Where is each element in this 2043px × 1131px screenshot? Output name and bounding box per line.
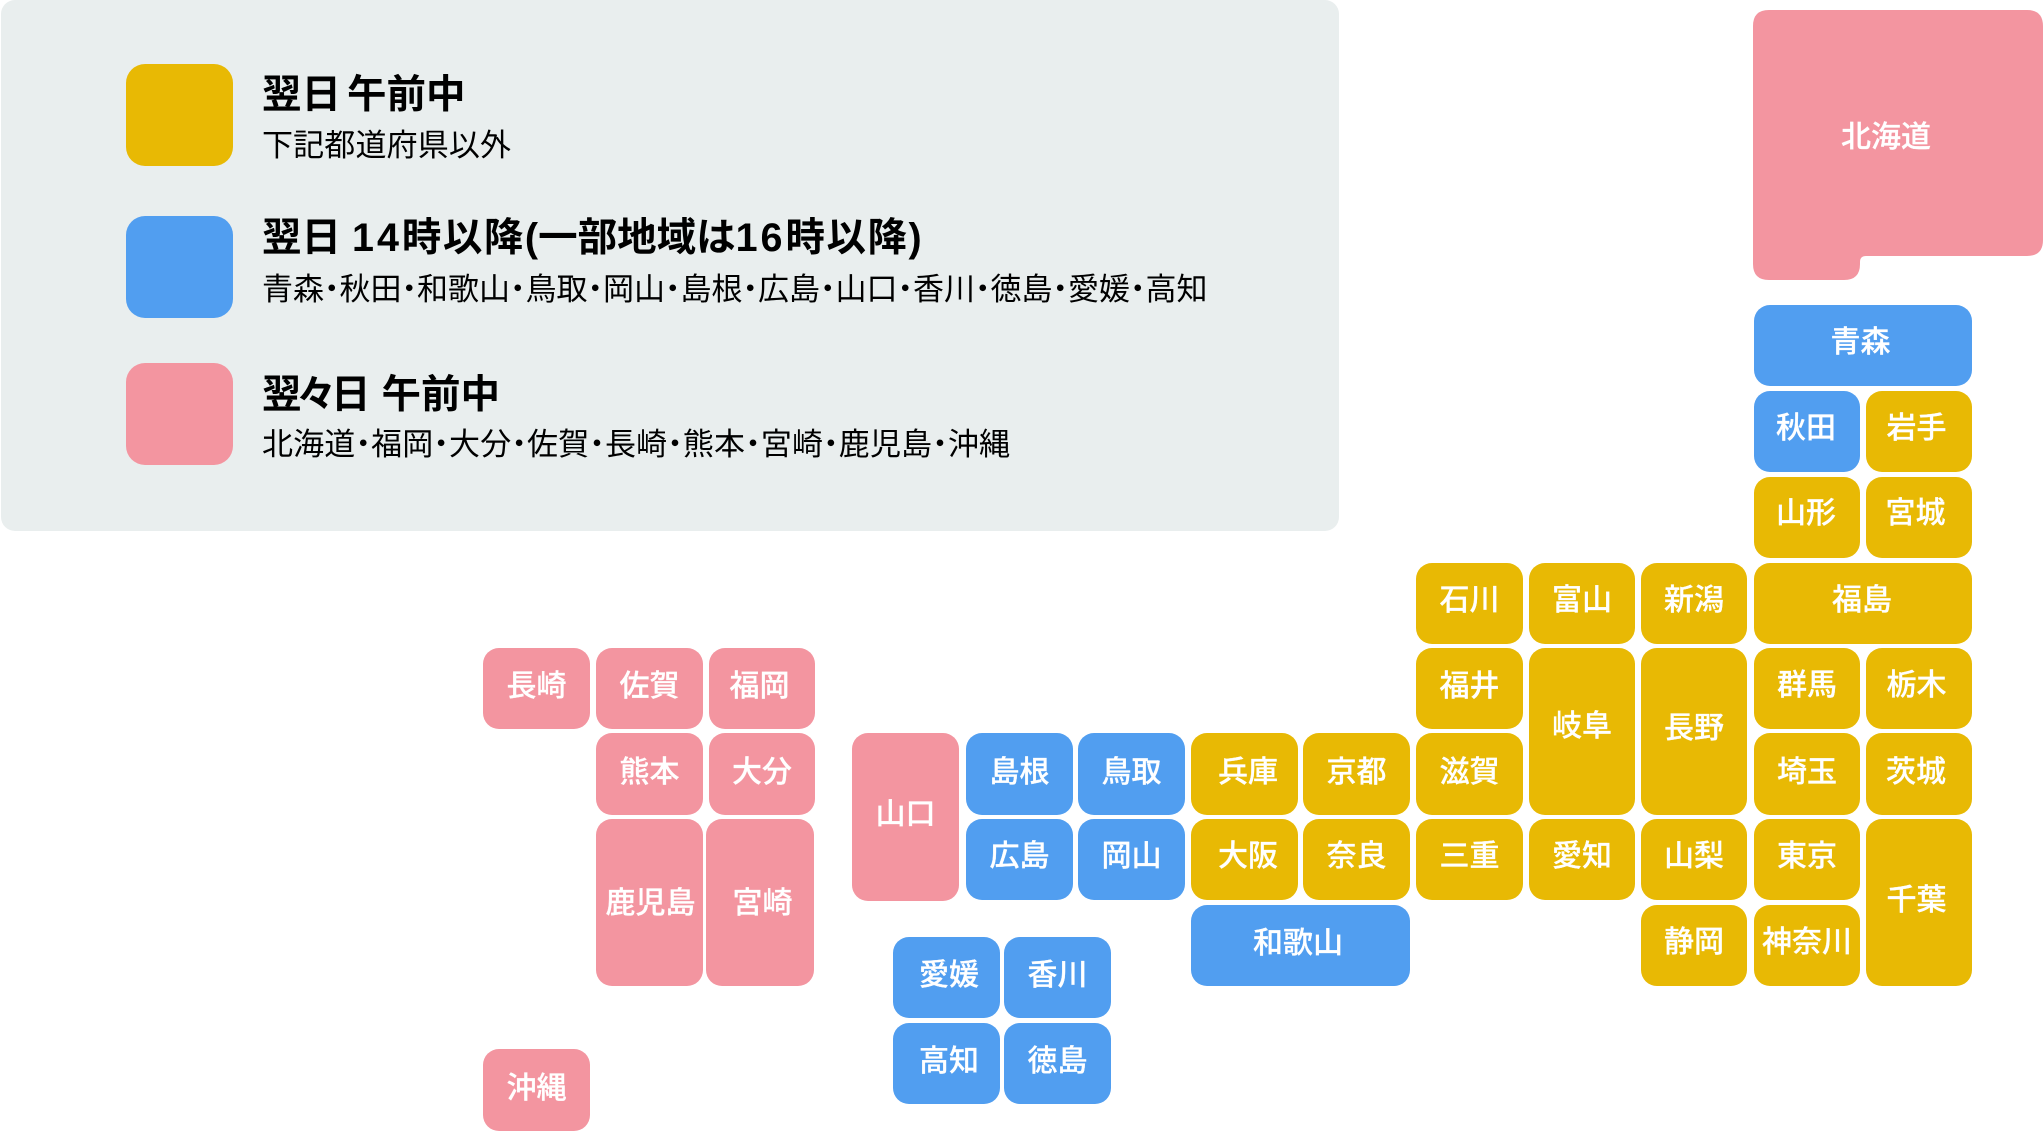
tile: 愛知	[1529, 819, 1635, 900]
tile: 神奈川	[1754, 905, 1860, 986]
tile: 岩手	[1866, 391, 1972, 472]
tile: 島根: 島根	[990, 746, 1050, 790]
tile: 岐阜	[1529, 648, 1635, 815]
tile: 埼玉: 埼玉	[1777, 746, 1837, 790]
tile: 北海道: 北海道	[1841, 112, 1931, 156]
tile: 広島	[966, 819, 1073, 900]
tile: 福島: 福島	[1832, 575, 1892, 619]
tile: 鳥取	[1078, 733, 1185, 815]
tile: 秋田	[1754, 391, 1860, 472]
tile: 新潟: 新潟	[1664, 575, 1724, 619]
tile: 北海道	[1753, 10, 2043, 280]
tile: 栃木: 栃木	[1886, 660, 1946, 704]
tile: 宮崎: 宮崎	[732, 878, 792, 922]
tile: 沖縄: 沖縄	[506, 1062, 566, 1106]
tile: 滋賀	[1416, 733, 1523, 815]
tile: 長野	[1641, 648, 1747, 815]
tile: 愛知: 愛知	[1552, 831, 1612, 875]
tile: 栃木	[1866, 648, 1972, 729]
tile: 群馬	[1754, 648, 1860, 729]
tile: 兵庫	[1191, 733, 1298, 815]
tile: 東京	[1754, 819, 1860, 900]
tile: 高知: 高知	[919, 1036, 979, 1080]
tile: 大分: 大分	[732, 746, 792, 790]
tile: 山形: 山形	[1776, 488, 1836, 532]
tile: 宮崎	[706, 819, 814, 986]
tile: 大阪	[1191, 819, 1298, 900]
tile: 岡山: 岡山	[1102, 831, 1162, 875]
tile: 埼玉	[1754, 733, 1860, 815]
tile: 青森: 青森	[1830, 317, 1890, 361]
tile: 青森	[1754, 305, 1972, 386]
tile: 香川: 香川	[1028, 950, 1088, 994]
tile: 熊本	[596, 733, 703, 815]
tile: 佐賀	[596, 648, 703, 729]
tile: 長崎: 長崎	[506, 661, 566, 705]
legend swatch: yellow	[126, 64, 233, 166]
tile: 静岡: 静岡	[1664, 917, 1724, 961]
tile: 福井	[1416, 648, 1523, 729]
tile: 鹿児島: 鹿児島	[606, 878, 696, 922]
tile: 茨城: 茨城	[1886, 746, 1946, 790]
tile: 福井: 福井	[1440, 661, 1500, 705]
tile: 京都	[1303, 733, 1410, 815]
tile: 香川	[1004, 937, 1111, 1018]
tile: 石川	[1416, 563, 1523, 644]
tile: 茨城	[1866, 733, 1972, 815]
legend heading: next day morning: 翌日 午前中	[262, 73, 465, 117]
tile: 大分	[709, 733, 815, 815]
tile: 千葉	[1866, 819, 1972, 986]
tile: 長崎	[483, 648, 590, 729]
tile: 岩手: 岩手	[1886, 403, 1946, 447]
tile: 徳島: 徳島	[1028, 1036, 1088, 1080]
tile: 富山: 富山	[1552, 575, 1612, 619]
panel: legend	[1, 0, 1339, 531]
tile: 愛媛	[893, 937, 1000, 1018]
tile: 山梨	[1641, 819, 1747, 900]
tile: 福岡: 福岡	[730, 661, 790, 705]
tile: 宮城: 宮城	[1886, 488, 1946, 532]
tile: 東京: 東京	[1777, 831, 1837, 875]
legend text: pink prefectures: 北海道・福岡・大分・佐賀・長崎・熊本・宮崎・鹿児島・沖縄	[262, 427, 1010, 462]
tile: 和歌山: 和歌山	[1253, 918, 1343, 962]
tile: 長野: 長野	[1664, 702, 1724, 746]
tile: 山口: 山口	[876, 788, 936, 832]
tile: 岡山	[1078, 819, 1185, 900]
tile: 福島	[1754, 563, 1972, 644]
legend swatch: pink	[126, 363, 233, 465]
tile: 群馬: 群馬	[1777, 660, 1837, 704]
tile: 宮城	[1866, 477, 1972, 558]
tile: 京都: 京都	[1326, 746, 1386, 790]
legend heading: next day after 14:00: 翌日 14時以降(一部地域は16時以降)	[262, 216, 922, 260]
legend heading: two days later morning: 翌々日 午前中	[262, 373, 500, 417]
tile: 山口	[852, 733, 959, 901]
tile: 山形	[1754, 477, 1860, 558]
legend text: blue prefectures: 青森・秋田・和歌山・鳥取・岡山・島根・広島・山口・香川・徳島・愛媛・高知	[262, 272, 1208, 307]
tile: 山梨: 山梨	[1664, 831, 1724, 875]
tile: 鳥取: 鳥取	[1102, 746, 1162, 790]
tile: 石川: 石川	[1440, 575, 1500, 619]
tile: 奈良	[1303, 819, 1410, 900]
tile: 奈良: 奈良	[1326, 831, 1386, 875]
tile: 千葉: 千葉	[1886, 874, 1946, 918]
tile: 沖縄	[483, 1049, 590, 1131]
tile: 滋賀: 滋賀	[1440, 746, 1500, 790]
tile: 愛媛: 愛媛	[919, 950, 979, 994]
tile: 鹿児島	[596, 819, 703, 986]
tile: 三重	[1416, 819, 1523, 900]
tile: 熊本: 熊本	[620, 746, 680, 790]
tile: 高知	[893, 1023, 1000, 1104]
tile: 岐阜: 岐阜	[1552, 700, 1612, 744]
tile: 大阪: 大阪	[1218, 831, 1278, 875]
tile: 秋田: 秋田	[1776, 403, 1836, 447]
tile: 徳島	[1004, 1023, 1111, 1104]
tile: 神奈川: 神奈川	[1762, 917, 1852, 961]
tile: 福岡	[709, 648, 815, 729]
tile: 三重: 三重	[1440, 831, 1500, 875]
legend text: yellow prefectures: 下記都道府県以外	[262, 128, 511, 163]
tile: 広島: 広島	[990, 831, 1050, 875]
tile: 島根	[966, 733, 1073, 815]
tile: 富山	[1529, 563, 1635, 644]
tile: 新潟	[1641, 563, 1747, 644]
tile: 佐賀: 佐賀	[620, 661, 680, 705]
tile: 兵庫: 兵庫	[1218, 746, 1278, 790]
tile: 和歌山	[1191, 905, 1410, 986]
tile: 静岡	[1641, 905, 1747, 986]
legend swatch: blue	[126, 216, 233, 318]
